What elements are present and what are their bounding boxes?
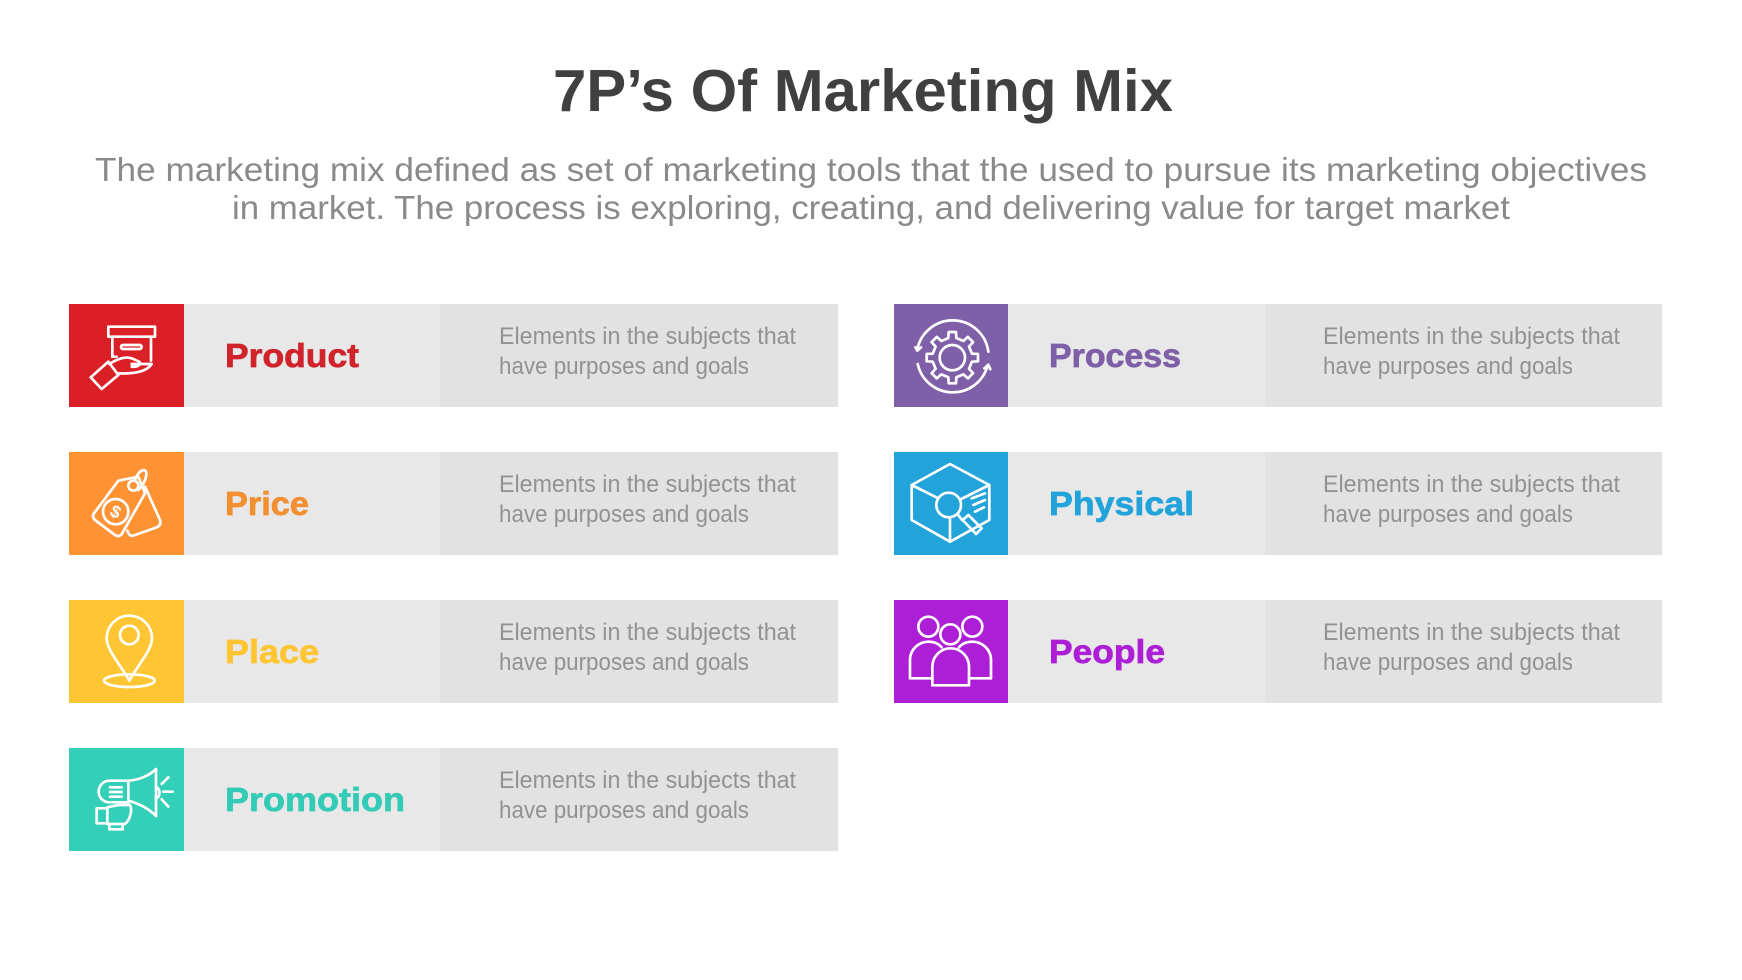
panel: physical xyxy=(894,452,1662,555)
icon: megaphone xyxy=(97,769,173,829)
subtitle: The marketing mix defined as set of marketing tools that the used to pursue its marketing objectives xyxy=(95,151,1647,188)
description: product: Elements in the subjects that xyxy=(499,323,796,350)
panel: price xyxy=(69,452,838,555)
title: 7P’s Of Marketing Mix xyxy=(553,58,1173,124)
description: process: have purposes and goals xyxy=(1323,353,1573,380)
description: promotion: Elements in the subjects that xyxy=(499,767,796,794)
panel: product xyxy=(69,304,838,407)
description: physical: have purposes and goals xyxy=(1323,501,1573,528)
panel: promotion xyxy=(69,748,838,851)
label: price: Price xyxy=(225,485,309,522)
label: promotion: Promotion xyxy=(225,781,405,818)
icon: box with magnifier xyxy=(912,464,989,542)
description: physical: Elements in the subjects that xyxy=(1323,471,1620,498)
description: promotion: have purposes and goals xyxy=(499,797,749,824)
label: process: Process xyxy=(1049,337,1181,374)
icon: gear with cycle arrows xyxy=(915,320,990,392)
description: place: Elements in the subjects that xyxy=(499,619,796,646)
description: physical xyxy=(1323,471,1620,528)
label: place: Place xyxy=(225,633,319,670)
description: place: have purposes and goals xyxy=(499,649,749,676)
panel: people xyxy=(894,600,1662,703)
description: price xyxy=(499,471,796,528)
icon: location pin xyxy=(104,616,155,687)
description: place xyxy=(499,619,796,676)
panel: place xyxy=(69,600,838,703)
description: people: have purposes and goals xyxy=(1323,649,1573,676)
icon: group of people xyxy=(910,617,991,685)
description: promotion xyxy=(499,767,796,824)
subtitle xyxy=(95,151,1647,226)
description: people: Elements in the subjects that xyxy=(1323,619,1620,646)
description: process: Elements in the subjects that xyxy=(1323,323,1620,350)
description: price: have purposes and goals xyxy=(499,501,749,528)
icon: hand holding box xyxy=(91,327,155,389)
description: people xyxy=(1323,619,1620,676)
icon: price tags: $ xyxy=(107,501,125,523)
label: people: People xyxy=(1049,633,1165,670)
panel: process xyxy=(894,304,1662,407)
icon: price tags xyxy=(93,470,160,536)
label: physical: Physical xyxy=(1049,485,1194,522)
description: process xyxy=(1323,323,1620,380)
subtitle: in market. The process is exploring, creating, and delivering value for target market xyxy=(232,189,1510,226)
description: product xyxy=(499,323,796,380)
label: product: Product xyxy=(225,337,359,374)
description: price: Elements in the subjects that xyxy=(499,471,796,498)
description: product: have purposes and goals xyxy=(499,353,749,380)
